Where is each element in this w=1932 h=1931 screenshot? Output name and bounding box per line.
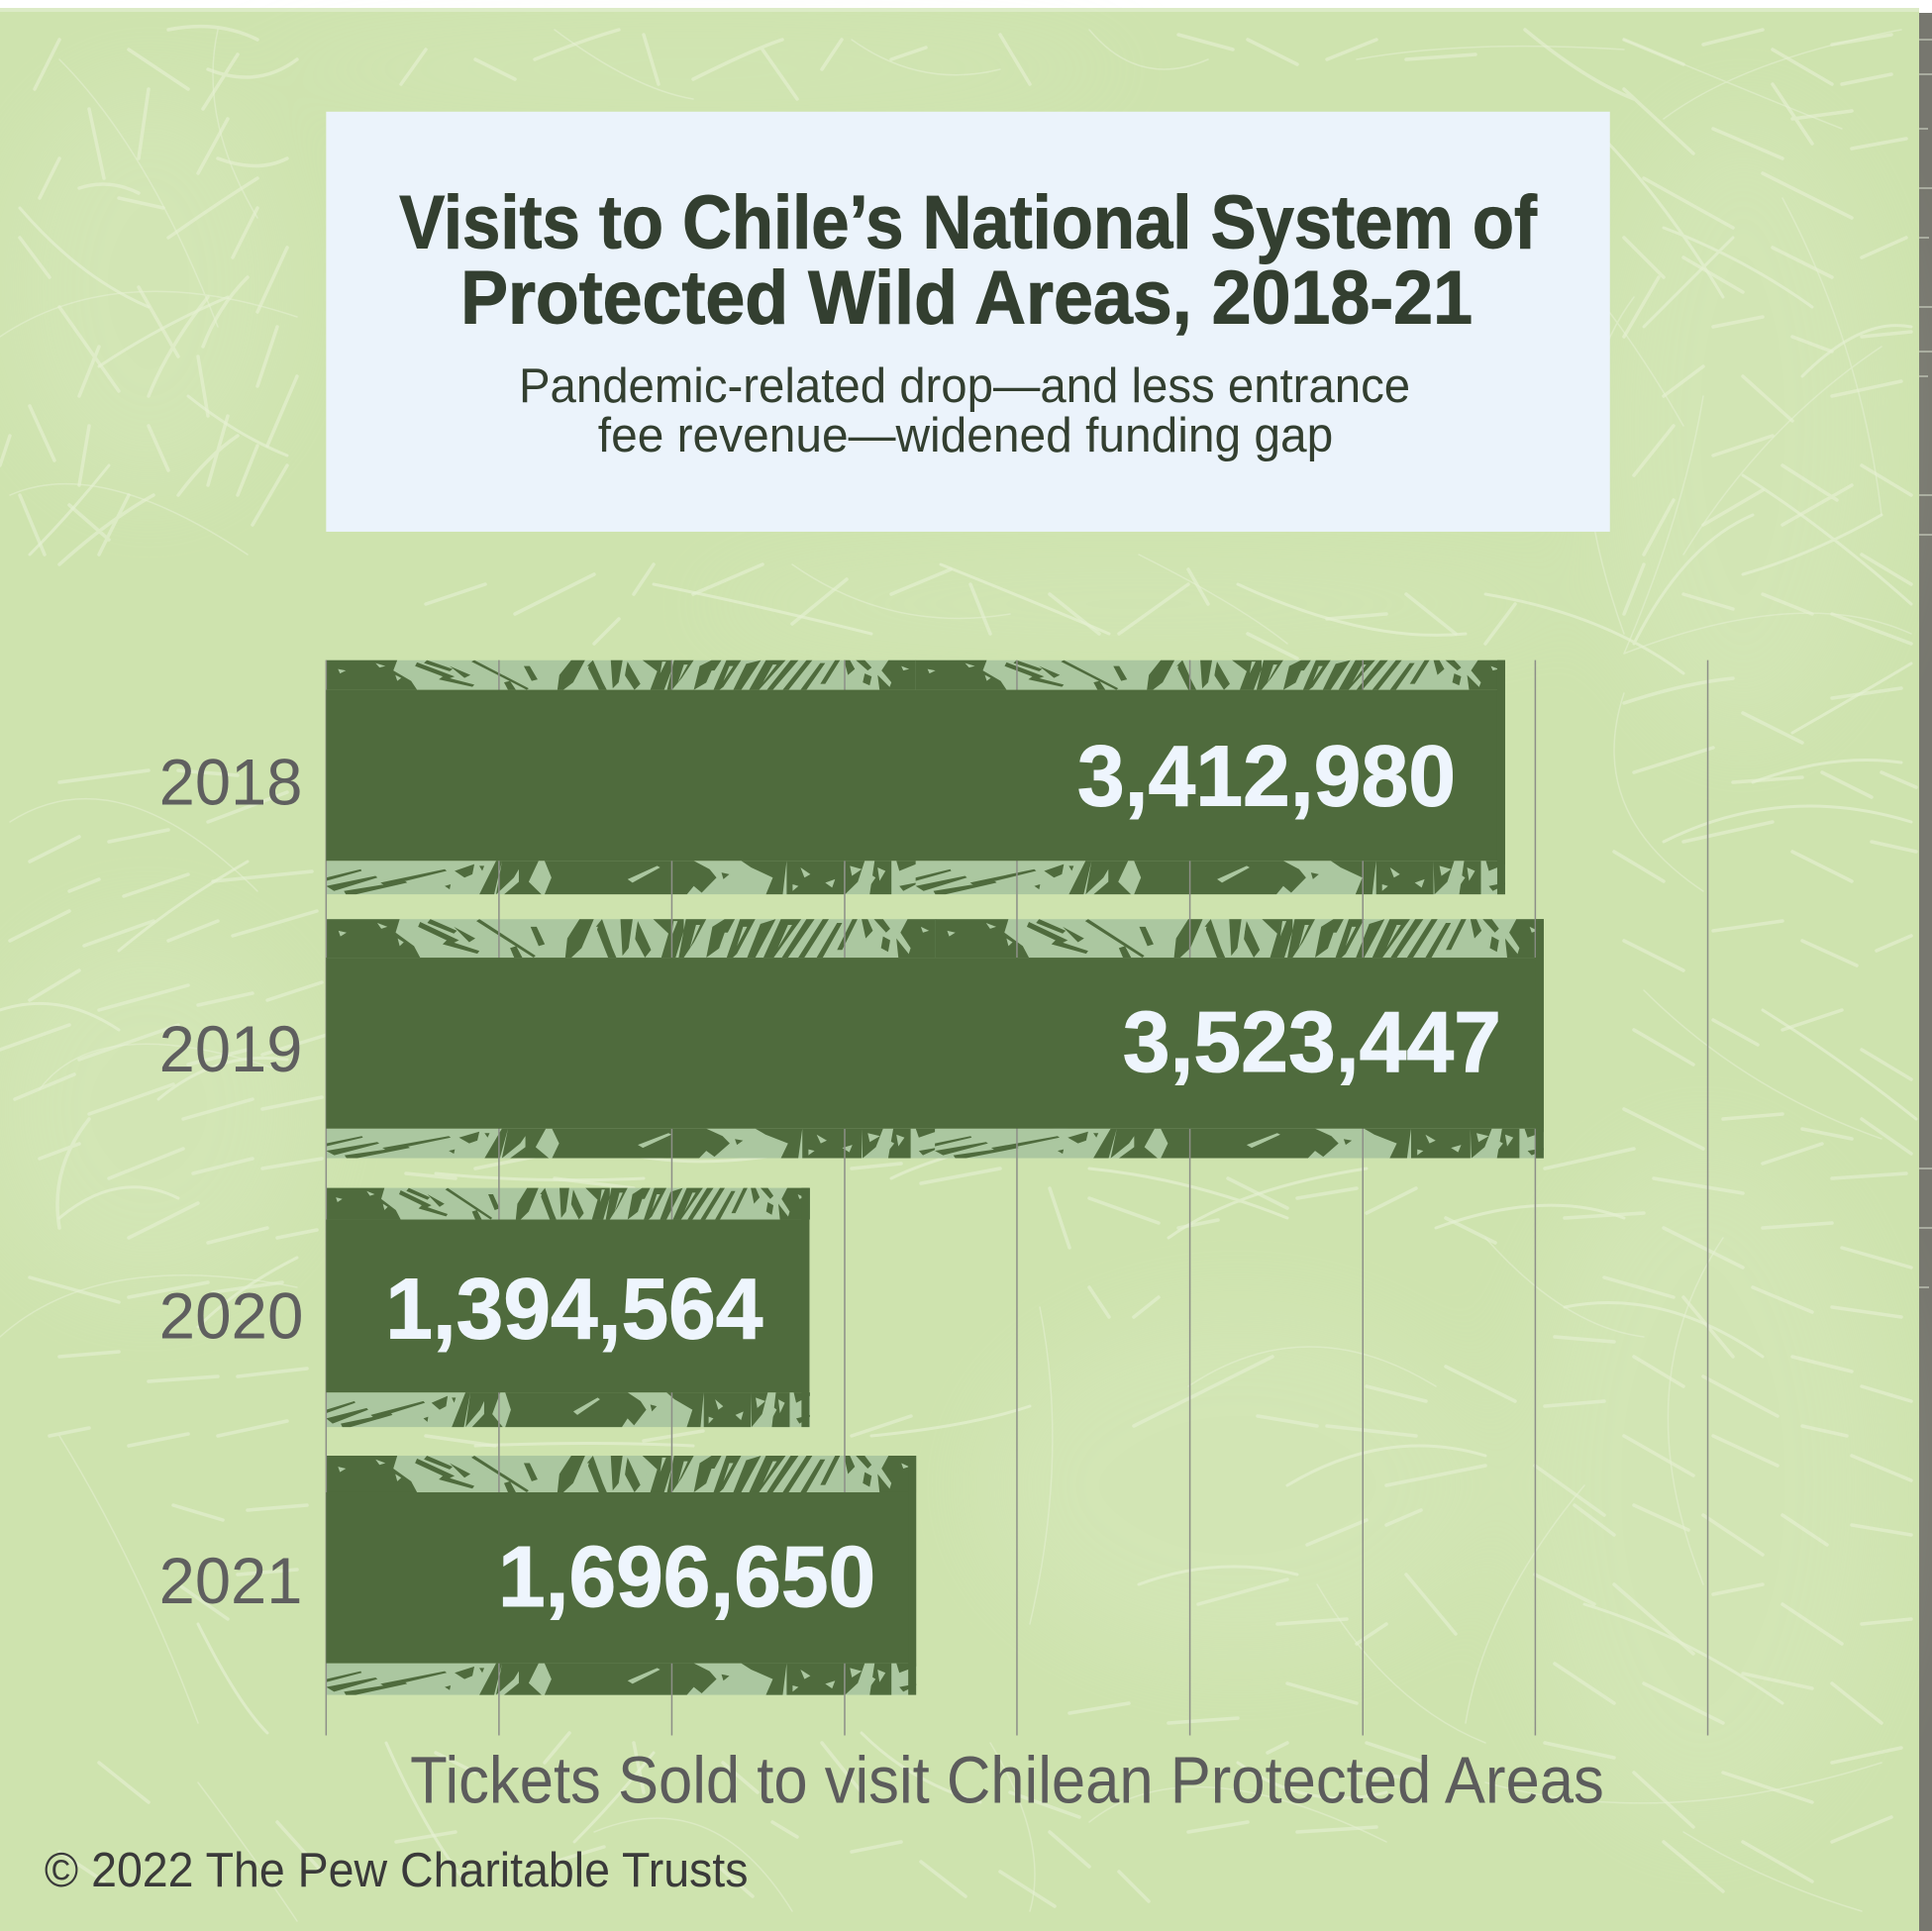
bar: 2019 <box>159 919 1544 1159</box>
bar: 2021 <box>159 1456 916 1695</box>
bar: 2018: 2018 <box>159 745 302 818</box>
bar: 2021: 2021 <box>159 1544 302 1617</box>
bar: 2020: 2020 <box>159 1278 303 1352</box>
bar: 2020 <box>159 1188 809 1427</box>
mid band and bottom <box>59 564 1515 1896</box>
bar textures: 2019 <box>326 919 1545 1159</box>
title: Visits to Chile’s National System of <box>399 180 1538 264</box>
bar: 2018: 3,412,980 <box>1077 728 1456 824</box>
bar: 2018 <box>159 661 1505 894</box>
axis title: Tickets Sold to visit Chilean Protected Areas <box>410 1743 1604 1817</box>
bar textures: 2018 <box>326 661 1505 894</box>
right, middle <box>1614 678 1916 1154</box>
bar textures: 2021 <box>326 1456 916 1695</box>
bar textures: 2020 <box>326 1188 810 1427</box>
subtitle <box>519 359 1410 462</box>
bar: 2020: 1,394,564 <box>385 1261 763 1357</box>
title <box>399 180 1538 340</box>
grid lines <box>326 661 1708 1735</box>
subtitle: Pandemic-related drop—and less entrance <box>519 359 1410 413</box>
title panel <box>326 112 1610 532</box>
bar: 2021: 1,696,650 <box>498 1529 875 1625</box>
left column, upper <box>0 27 297 564</box>
left column, lower <box>0 770 327 1619</box>
top band and right <box>401 30 1911 644</box>
subtitle: fee revenue—widened funding gap <box>598 409 1333 462</box>
centre, lower <box>1000 1178 1604 1906</box>
copyright credit: © 2022 The Pew Charitable Trusts <box>45 1844 748 1897</box>
bar: 2019: 2019 <box>159 1012 302 1085</box>
bar chart <box>159 661 1708 1735</box>
bar: 2019: 3,523,447 <box>1123 994 1501 1090</box>
title: Protected Wild Areas, 2018-21 <box>460 255 1473 340</box>
right, lower <box>1287 1144 1911 1891</box>
